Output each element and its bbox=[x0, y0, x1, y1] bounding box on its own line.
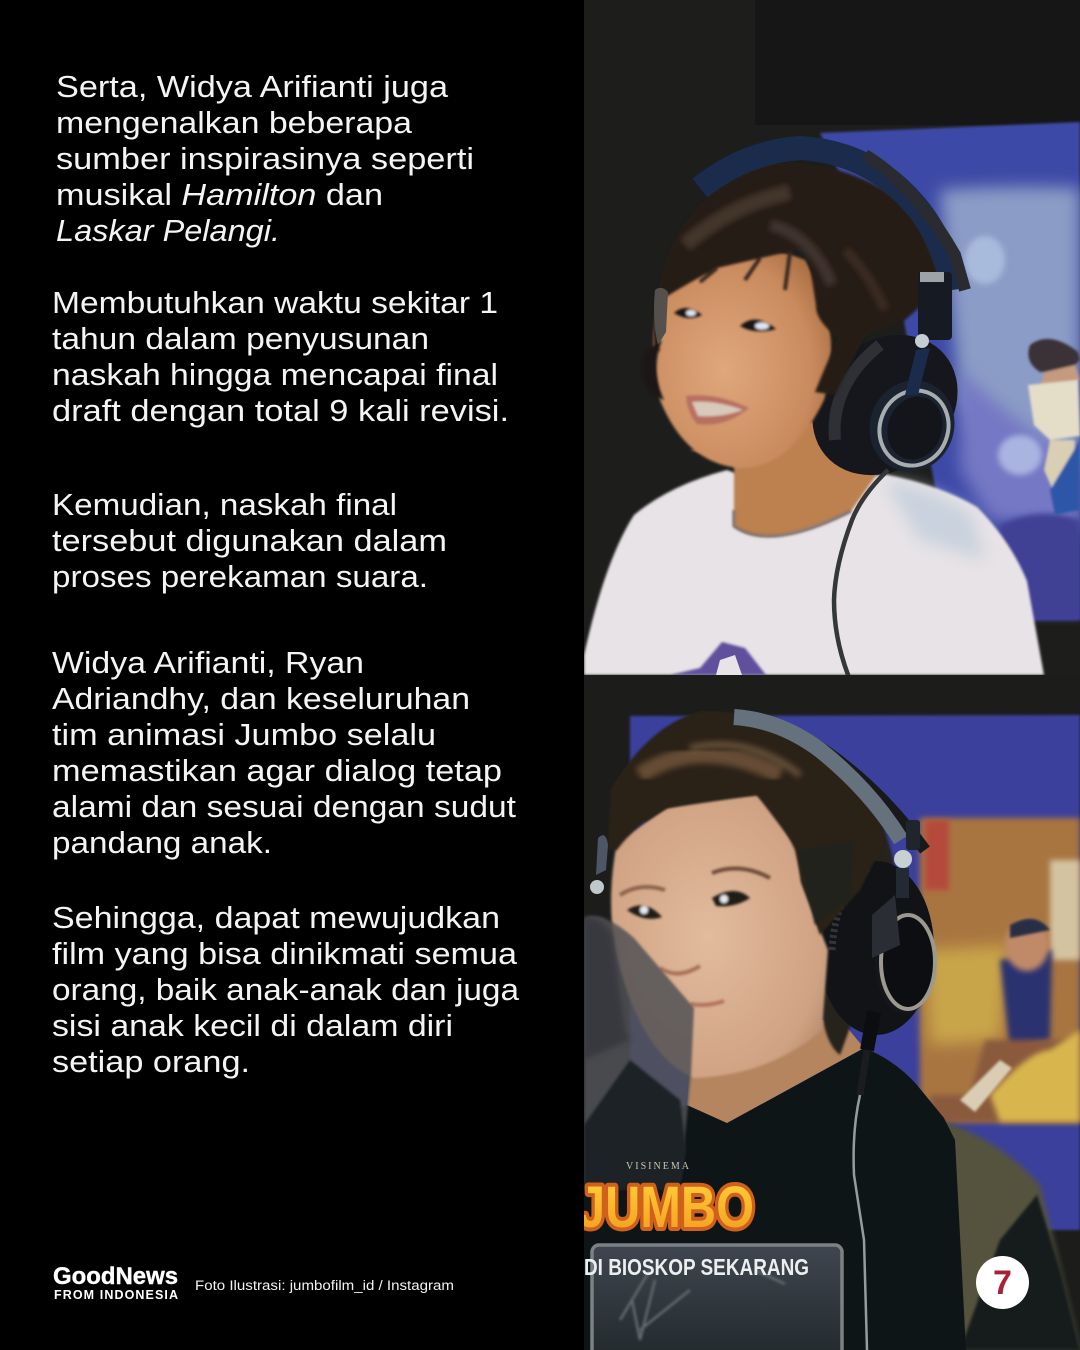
pop filter bbox=[584, 916, 694, 1190]
paragraph: script timeline: draft dengan total 9 kali revisi. bbox=[52, 393, 509, 428]
headphone yoke bbox=[905, 272, 952, 395]
cable bbox=[854, 1012, 874, 1350]
paragraph: inspiration sources: sumber inspirasinya seperti bbox=[56, 141, 474, 176]
photo: girl with headphones bbox=[584, 0, 1080, 680]
photo credit: Foto Ilustrasi: jumbofilm_id / Instagram bbox=[195, 1278, 454, 1293]
headband bbox=[734, 717, 925, 850]
logo: GoodNews from Indonesia: GoodNews bbox=[53, 1263, 178, 1290]
hair back bbox=[611, 712, 895, 1055]
paragraph: script timeline: tahun dalam penyusunan bbox=[52, 321, 429, 356]
hair front bbox=[608, 712, 884, 935]
collar bbox=[734, 510, 851, 536]
neck bbox=[687, 1020, 864, 1123]
hoodie bbox=[584, 1048, 966, 1350]
logo: GoodNews from Indonesia bbox=[53, 1263, 178, 1302]
hair bbox=[642, 163, 945, 400]
paragraph: inspiration sources bbox=[56, 69, 474, 248]
chest print bbox=[592, 1245, 842, 1350]
animated poster behind girl bbox=[820, 122, 1080, 620]
blue poster behind boy bbox=[630, 715, 1080, 1230]
left headphone hinge bbox=[654, 288, 668, 345]
paragraph: natural dialogue: memastikan agar dialog tetap bbox=[52, 753, 502, 788]
paragraph: inspiration sources: musikal Hamilton dan bbox=[56, 177, 383, 212]
face bbox=[653, 249, 831, 468]
paragraph: film for everyone bbox=[52, 900, 520, 1079]
hoodie shoulder bbox=[940, 1120, 1080, 1350]
paragraph: inspiration sources: Laskar Pelangi. bbox=[56, 213, 280, 248]
page number badge: 7 bbox=[993, 1264, 1012, 1302]
face bbox=[611, 795, 828, 1078]
facial features bbox=[674, 308, 776, 425]
paragraph: script timeline: Membutuhkan waktu sekitar 1 bbox=[52, 285, 498, 320]
headphone hinges bbox=[590, 820, 920, 898]
page number badge bbox=[976, 1256, 1029, 1309]
neck bbox=[690, 420, 880, 536]
ear cup bbox=[818, 861, 935, 1035]
paragraph: natural dialogue: pandang anak. bbox=[52, 825, 272, 860]
paragraph: film for everyone: orang, baik anak-anak dan juga bbox=[52, 972, 520, 1007]
cinema caption: DI BIOSKOP SEKARANG bbox=[584, 1254, 809, 1280]
logo: GoodNews from Indonesia: FROM INDONESIA bbox=[54, 1288, 178, 1302]
Visinema label: VISINEMA bbox=[626, 1161, 690, 1172]
paragraph: natural dialogue bbox=[52, 645, 516, 860]
paragraph: natural dialogue: tim animasi Jumbo selalu bbox=[52, 717, 436, 752]
paragraph: voice recording: proses perekaman suara. bbox=[52, 559, 428, 594]
Jumbo logo: JUMBO bbox=[578, 1175, 754, 1240]
paragraph: voice recording: Kemudian, naskah final bbox=[52, 487, 397, 522]
poster character bbox=[1028, 339, 1080, 515]
orange artwork bbox=[920, 818, 1080, 1122]
headband bbox=[700, 148, 965, 290]
cable bbox=[834, 470, 888, 680]
paragraph: script timeline bbox=[52, 285, 509, 428]
hoodie sleeve bbox=[960, 1195, 1080, 1350]
paragraph: natural dialogue: Adriandhy, dan keseluruhan bbox=[52, 681, 470, 716]
paragraph: film for everyone: sisi anak kecil di dalam diri bbox=[52, 1008, 453, 1043]
paragraph: voice recording bbox=[52, 487, 447, 594]
paragraph: natural dialogue: alami dan sesuai dengan sudut bbox=[52, 789, 516, 824]
photo: boy with headphones bbox=[578, 675, 1080, 1350]
paragraph: inspiration sources: mengenalkan beberapa bbox=[56, 105, 413, 140]
paragraph: film for everyone: film yang bisa dinikmati semua bbox=[52, 936, 518, 971]
paragraph: voice recording: tersebut digunakan dalam bbox=[52, 523, 447, 558]
paragraph: film for everyone: setiap orang. bbox=[52, 1044, 250, 1079]
paragraph: script timeline: naskah hingga mencapai final bbox=[52, 357, 498, 392]
facial features bbox=[620, 869, 770, 1005]
ear cup pad bbox=[812, 335, 958, 476]
paragraph: film for everyone: Sehingga, dapat mewujudkan bbox=[52, 900, 500, 935]
t-shirt bbox=[584, 470, 1044, 675]
paragraph: inspiration sources: Serta, Widya Arifianti juga bbox=[56, 69, 449, 104]
paragraph: natural dialogue: Widya Arifianti, Ryan bbox=[52, 645, 364, 680]
